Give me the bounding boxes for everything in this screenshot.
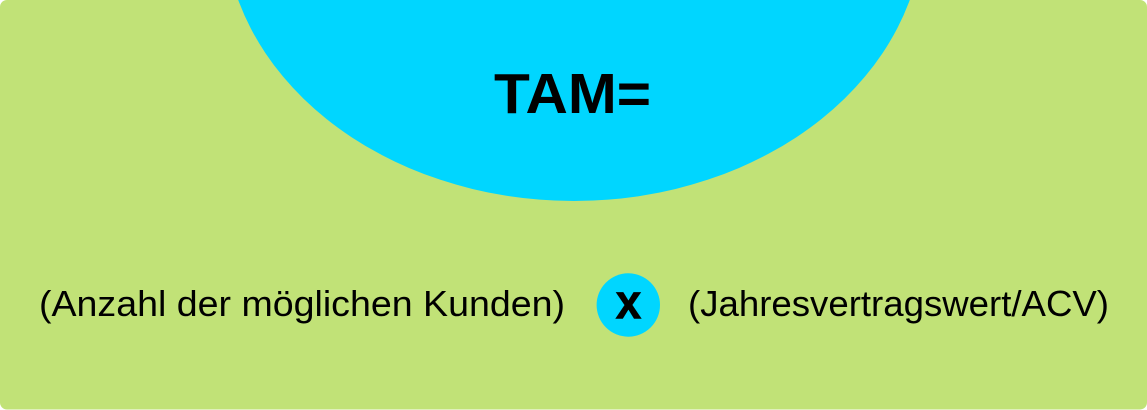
text: number of possible customers: (Anzahl der möglichen Kunden) [39,283,565,324]
icon: multiplication circle: x [616,275,642,329]
title: TAM=: TAM= [494,62,651,126]
icon: multiplication circle [597,273,660,337]
shape: blue half ellipse [224,0,924,201]
text: annual contract value: (Jahresvertragswert/ACV) [688,283,1109,324]
